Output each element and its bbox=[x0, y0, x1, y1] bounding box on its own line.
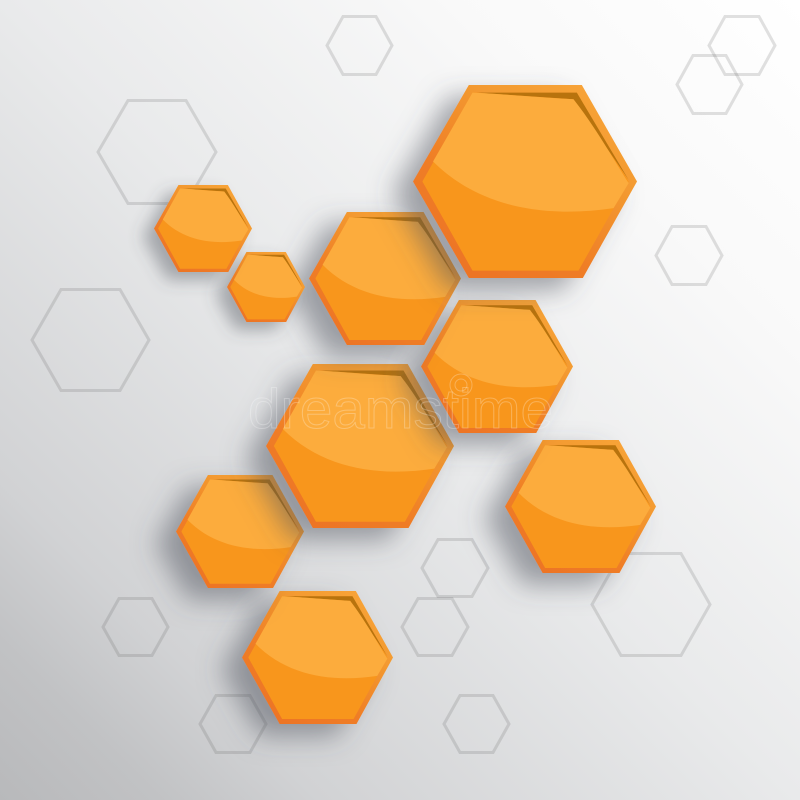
orange hexagon: top large bbox=[413, 85, 637, 278]
watermark: dreamstime bbox=[248, 377, 553, 440]
outline hexagon: bottom centre bbox=[444, 696, 509, 752]
outline hexagon: lower left bbox=[103, 598, 168, 656]
outline hexagon: top right lower bbox=[677, 56, 742, 114]
orange hexagon: centre right bbox=[421, 300, 573, 433]
orange hexagon: upper left bbox=[154, 185, 252, 272]
orange hexagon: upper centre bbox=[309, 212, 461, 345]
outline hexagon: upper left large bbox=[98, 100, 216, 204]
outline hexagon: top right upper bbox=[709, 16, 775, 74]
outline hexagon: lower right large bbox=[592, 554, 710, 656]
orange hexagon: right bbox=[505, 440, 656, 573]
outline hexagon: top centre bbox=[327, 16, 392, 74]
outline hexagon: right middle bbox=[656, 226, 722, 284]
orange hexagon: centre large bbox=[266, 364, 454, 528]
orange hexagon: lower left bbox=[176, 475, 304, 588]
orange hexagon: small bbox=[227, 252, 305, 322]
orange hexagon: bottom bbox=[242, 591, 393, 724]
outline hexagon: lower centre upper bbox=[422, 540, 488, 596]
outline hexagon: bottom left bbox=[200, 696, 266, 752]
outline hexagon: left large bbox=[32, 290, 149, 390]
outline hexagon: lower centre bbox=[402, 598, 468, 656]
